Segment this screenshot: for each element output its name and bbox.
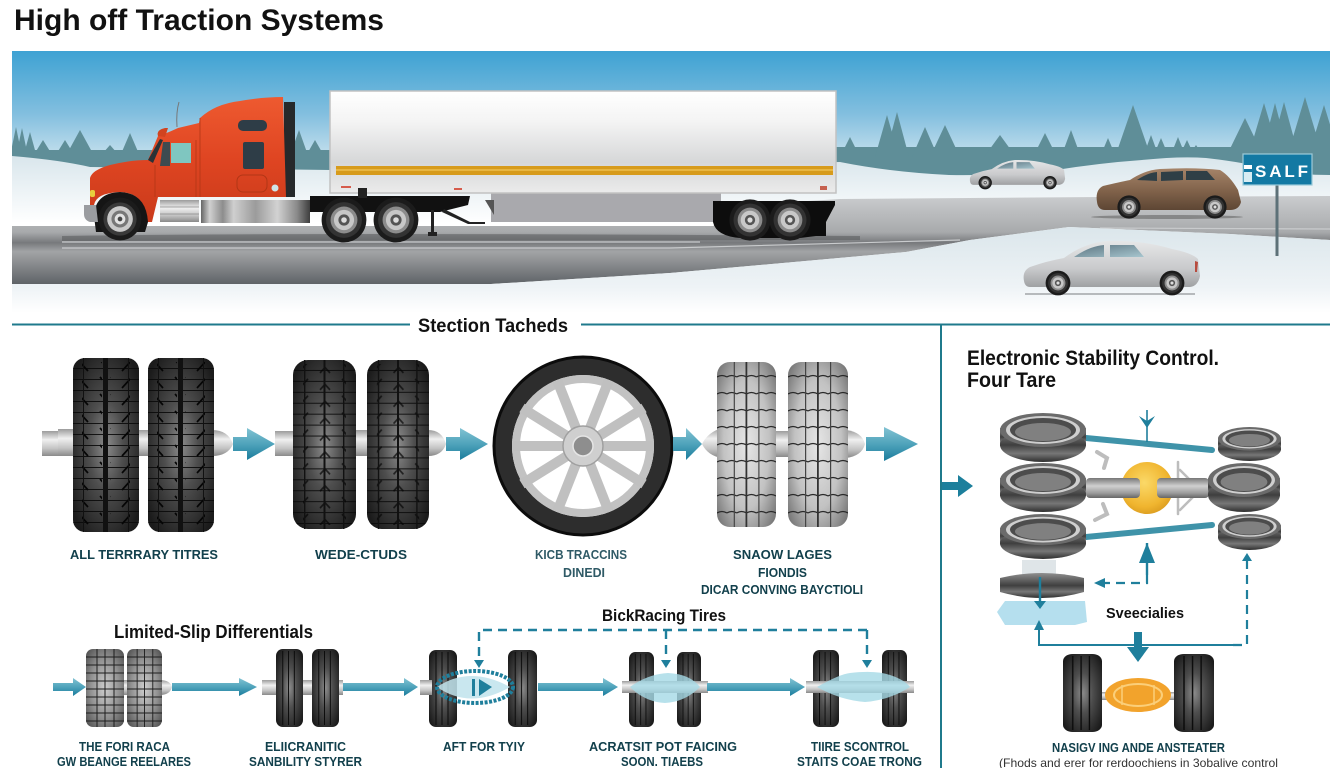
arrow bbox=[343, 678, 418, 696]
labels: row 2 column 2 bbox=[249, 739, 363, 768]
arrow bbox=[538, 678, 618, 696]
arrow bbox=[446, 428, 488, 460]
heading: Four Tare bbox=[967, 369, 1056, 392]
car: brown SUV bbox=[1091, 168, 1243, 219]
labels: row 2 column 1 bbox=[57, 739, 191, 768]
labels: row 2 column 5: TIIRE SCONTROL bbox=[811, 739, 909, 754]
differential with teal housing bbox=[420, 650, 537, 727]
dashed feedback lines bbox=[477, 630, 867, 660]
differential: clear housing bbox=[622, 652, 708, 727]
snow hills bbox=[12, 156, 330, 208]
tire group: snow bbox=[702, 362, 865, 527]
arrow bbox=[233, 428, 275, 460]
arrow bbox=[53, 678, 86, 696]
road bbox=[12, 196, 1330, 284]
tire group: all terrain bbox=[42, 358, 233, 532]
heading bbox=[967, 347, 1219, 392]
labels: row 2 column 2: ELIICRANITIC bbox=[265, 739, 347, 754]
title: High off Traction Systems bbox=[14, 4, 384, 37]
wheel with spokes bbox=[494, 357, 672, 535]
axle with orange differential bbox=[1063, 654, 1214, 732]
road sign bbox=[1243, 154, 1312, 256]
lower flat disc bbox=[1000, 560, 1084, 598]
caption bbox=[999, 740, 1278, 768]
lower snow bbox=[12, 227, 1330, 300]
label: all terrain: ALL TERRRARY TITRES bbox=[70, 547, 218, 562]
label: specialties: Sveecialies bbox=[1106, 605, 1184, 622]
heading: Electronic Stability Control. bbox=[967, 347, 1219, 370]
arrow bbox=[866, 427, 918, 461]
panel: electronic stability control bbox=[942, 347, 1281, 768]
label: snow: DICAR CONVING BAYCTIOLI bbox=[701, 582, 863, 597]
label: wede-ctuds: WEDE-CTUDS bbox=[315, 547, 407, 562]
heading: racing tires: BickRacing Tires bbox=[602, 606, 726, 625]
label: snow bbox=[701, 547, 863, 597]
arrow bbox=[172, 678, 257, 696]
sky bbox=[12, 51, 1330, 150]
labels: row 2 column 1: THE FORI RACA bbox=[79, 739, 171, 754]
car: front silver sedan bbox=[1024, 241, 1200, 295]
stacked brake discs bbox=[1000, 413, 1281, 559]
label: traction wheel bbox=[535, 548, 627, 580]
section heading: Stection Tacheds bbox=[418, 316, 568, 337]
labels: row 2 column 4 bbox=[589, 739, 737, 768]
labels: row 2 column 5 bbox=[797, 739, 922, 768]
label: traction wheel: DINEDI bbox=[563, 566, 605, 580]
arrow bbox=[707, 678, 805, 696]
label: traction wheel: KICB TRACCINS bbox=[535, 548, 627, 562]
central yellow sphere and shafts bbox=[1086, 462, 1209, 514]
car: far silver sedan bbox=[970, 160, 1065, 189]
brake links bbox=[1086, 438, 1212, 537]
tire group: wede-ctuds bbox=[275, 360, 446, 529]
heading: limited-slip differentials: Limited-Slip Differentials bbox=[114, 622, 313, 642]
label: snow: SNAOW LAGES bbox=[733, 547, 832, 562]
road sign: SALF bbox=[1255, 162, 1308, 181]
label: snow: FIONDIS bbox=[758, 565, 807, 580]
entry arrow bbox=[942, 475, 973, 497]
ice patch bbox=[997, 601, 1087, 625]
trailer bbox=[330, 91, 836, 222]
trailer wheels bbox=[713, 199, 835, 241]
tire group: dark small bbox=[262, 649, 343, 727]
section divider lines bbox=[12, 324, 1330, 768]
caption: NASIGV ING ANDE ANSTEATER bbox=[1052, 740, 1226, 755]
panel: highway winter scene bbox=[9, 51, 1340, 313]
dashed arrow heads bbox=[474, 660, 872, 668]
tree line bbox=[12, 97, 1330, 176]
tire group: snow small bbox=[86, 649, 172, 727]
red truck tractor bbox=[84, 97, 485, 242]
control arrows bbox=[1034, 410, 1252, 662]
labels: row 2 column 4: ACRATSIT POT FAICING bbox=[589, 739, 737, 754]
label: row 2 column 3: AFT FOR TYIY bbox=[443, 739, 525, 754]
arrow bbox=[673, 428, 702, 460]
differential: long clear housing bbox=[806, 650, 914, 727]
